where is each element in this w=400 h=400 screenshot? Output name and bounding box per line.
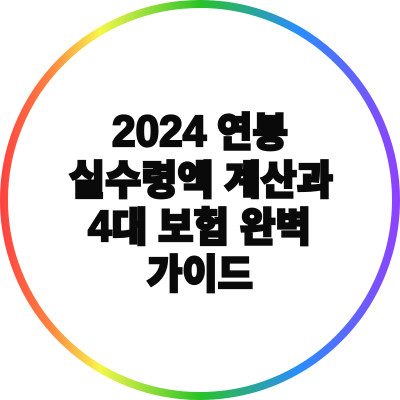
title <box>69 107 333 297</box>
title line 3: 4대 보험 완벽 <box>88 202 311 251</box>
title line 2: 실수령액 계산과 <box>69 159 333 203</box>
title line 4: 가이드 <box>147 253 253 297</box>
title line 1: 2024 연봉 <box>112 107 288 156</box>
